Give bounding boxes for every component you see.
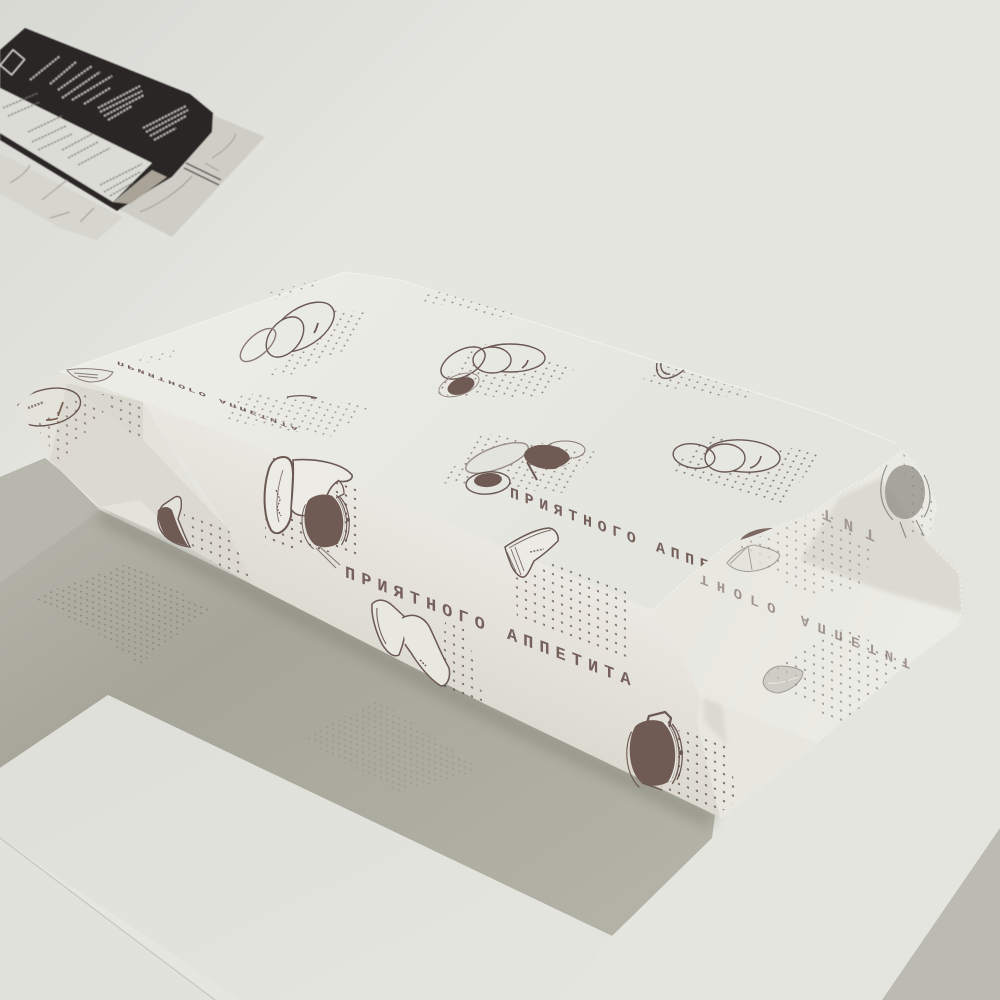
- cup front far left: [158, 496, 190, 547]
- bread and cup top 5: [462, 436, 585, 496]
- torn top-layer teeth: [653, 450, 903, 610]
- sheet fold line: [0, 838, 215, 1000]
- lighter upper shadow wedge: [0, 458, 100, 583]
- arc on top face: [287, 396, 317, 398]
- left gusset: [17, 372, 253, 585]
- top edge highlight: [60, 272, 895, 443]
- shadow cast on the table: [0, 458, 715, 936]
- cover icon: [0, 50, 25, 75]
- inner white page: [0, 88, 152, 202]
- dots top left strip: [220, 393, 373, 437]
- dark booklet cover: [0, 28, 213, 211]
- cover printed text: [30, 56, 188, 140]
- dots front far left: [183, 510, 253, 585]
- dots near bottom cup: [660, 730, 737, 813]
- faded cup right: [881, 465, 930, 538]
- inner shaded fold: [800, 478, 963, 614]
- torn flap edge teeth: [720, 450, 963, 817]
- dots flap right: [903, 450, 933, 537]
- sheet sketch lines: [10, 134, 236, 222]
- grey fold-out sheet: [118, 115, 265, 237]
- dark peek under torn edge: [740, 528, 773, 540]
- front face: [143, 402, 720, 817]
- bread and cup big front: [265, 457, 353, 568]
- cup bottom right: [624, 712, 685, 790]
- contact shadow beneath bag: [100, 515, 712, 820]
- bread front lower: [372, 600, 450, 686]
- lower flap layer: [653, 450, 963, 817]
- paper bag: [12, 272, 963, 817]
- taupe strip: [113, 170, 167, 204]
- dark stripes on sheet: [184, 163, 221, 185]
- flap pinch crease: [697, 697, 817, 817]
- dots flap upper: [737, 510, 873, 597]
- mirrored slogan on flap: ТНОГО АППЕТИТ: [700, 569, 918, 674]
- dot pattern seen through shadow centre: [300, 700, 482, 792]
- dots top 4: [640, 363, 750, 400]
- dots top 6: [440, 433, 597, 493]
- sheet lower portion: [0, 838, 215, 1000]
- slogan text on top: ПРИЯТНОГО АППЕТИТА: [510, 484, 773, 599]
- dots front left: [265, 450, 362, 556]
- slogan text on front: ПРИЯТНОГО АППЕТИТА: [345, 563, 637, 694]
- white sheet beneath the bag: [0, 695, 612, 1000]
- faded cup flap lower: [763, 666, 803, 693]
- dots gusset upper: [97, 393, 143, 443]
- lower left page: [0, 153, 123, 240]
- dots top 5: [667, 435, 820, 507]
- dots gusset left: [35, 395, 105, 462]
- faded sandwich flap: [727, 545, 780, 572]
- top face: [60, 272, 903, 610]
- squashed slogan top left: ПРИЯТНОГО АППЕТИТА: [117, 359, 301, 433]
- dot pattern seen through shadow left: [33, 563, 210, 665]
- dots flap lower: [763, 627, 907, 727]
- dots top 3: [432, 342, 577, 398]
- dots front right: [515, 560, 630, 658]
- flap pinch shadow: [703, 698, 727, 745]
- dot patches on bag: [35, 280, 933, 813]
- gusset shaded crease: [67, 383, 227, 528]
- bread top 1: [235, 292, 343, 367]
- bread and small cup top 2: [436, 340, 545, 402]
- dots top strip 3: [417, 290, 517, 320]
- breads top 4: [672, 437, 781, 475]
- dots top edge strip 1: [267, 280, 320, 300]
- illustrations on bag: [12, 292, 930, 790]
- page printed text: [3, 93, 142, 196]
- dots top edge strip 2: [133, 350, 177, 364]
- bottom right table corner: [882, 828, 1000, 1000]
- dots top 1: [270, 310, 365, 375]
- booklet in top left corner: [0, 28, 265, 240]
- mirrored slogan at opening: ТИТ: [822, 502, 887, 550]
- gusset lower shade: [50, 383, 253, 585]
- sandwich front: [505, 528, 558, 577]
- bread gusset upper: [67, 369, 113, 382]
- bread gusset left: [17, 387, 82, 427]
- dots front lower: [440, 622, 485, 705]
- bread arc top 3: [657, 363, 684, 378]
